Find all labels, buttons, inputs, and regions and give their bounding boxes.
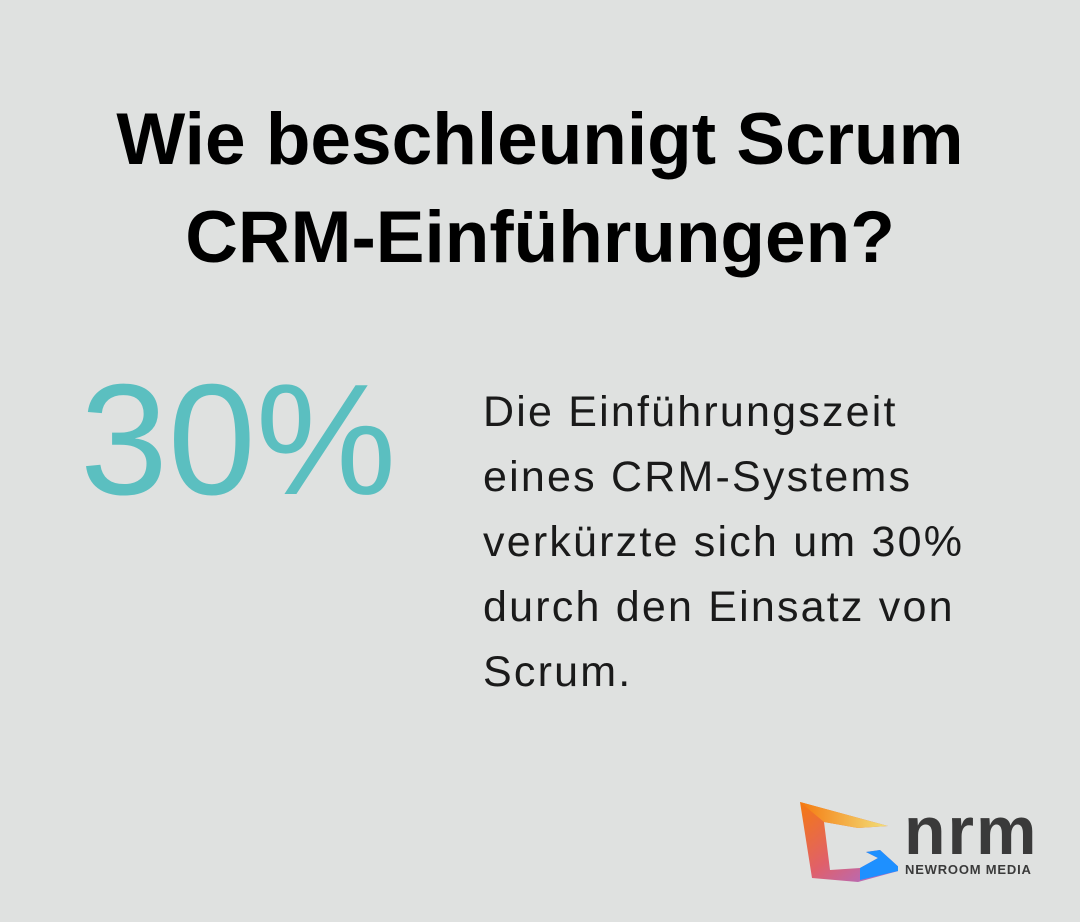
description text: Scrum. bbox=[483, 648, 632, 696]
description text: eines CRM-Systems bbox=[483, 453, 912, 501]
description text: verkürzte sich um 30% bbox=[483, 518, 964, 566]
description text bbox=[483, 388, 964, 696]
logo bbox=[800, 793, 1038, 882]
logo: NEWROOM MEDIA bbox=[905, 862, 1032, 877]
logo text: nrm bbox=[904, 793, 1038, 869]
description text: durch den Einsatz von bbox=[483, 583, 955, 631]
description text: Die Einführungszeit bbox=[483, 388, 898, 436]
icon: nrm logo mark bbox=[800, 802, 898, 882]
big stat: 30% bbox=[80, 352, 396, 528]
title: Wie beschleunigt Scrum bbox=[116, 99, 964, 180]
title bbox=[116, 99, 964, 278]
title: CRM-Einführungen? bbox=[185, 197, 895, 278]
